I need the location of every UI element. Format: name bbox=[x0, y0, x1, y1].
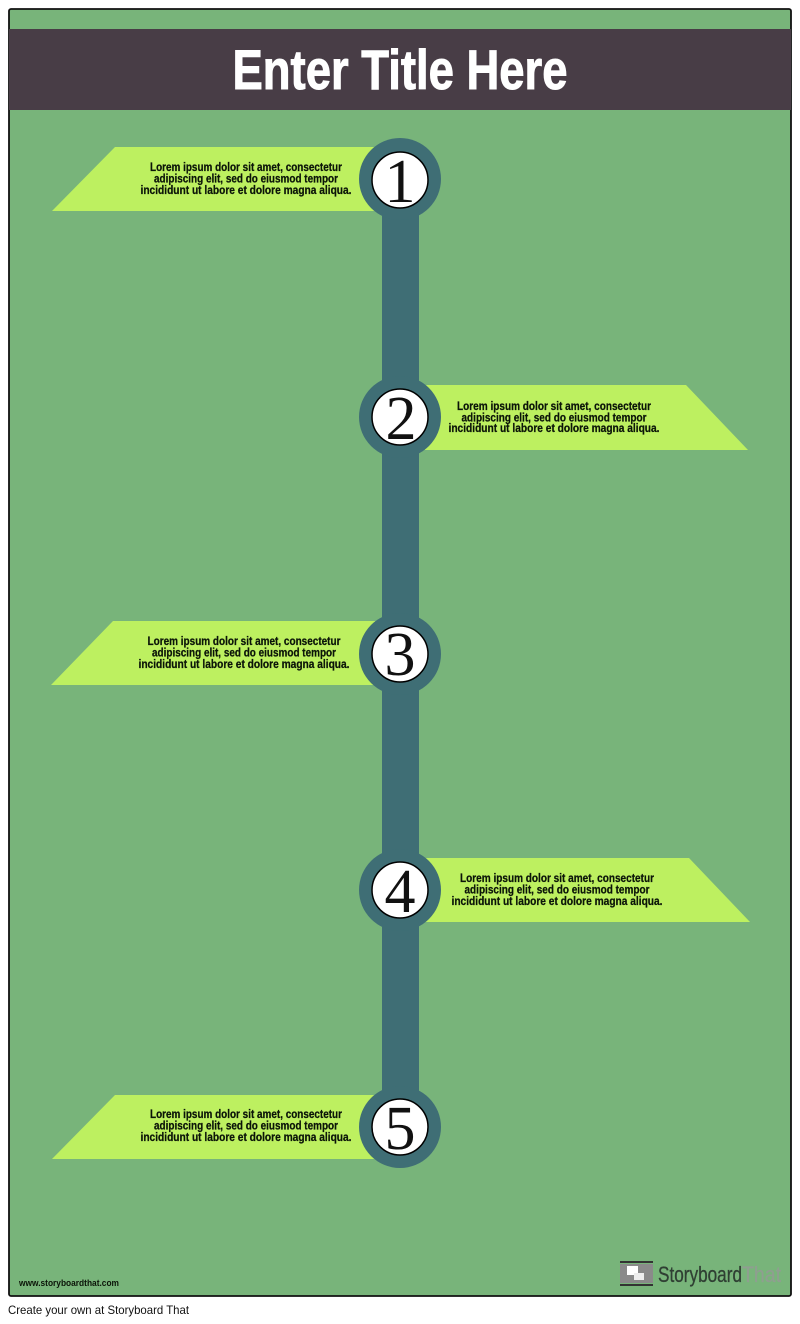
step marker 5 bbox=[359, 1086, 441, 1168]
callout 4: Lorem ipsum dolor sit amet, consectetur bbox=[460, 873, 654, 885]
callout 4 bbox=[425, 858, 750, 922]
timeline bar bbox=[382, 179, 419, 1127]
Storyboard That logo: Storyboard bbox=[658, 1262, 742, 1287]
callout 2 bbox=[425, 385, 748, 450]
callout 5: Lorem ipsum dolor sit amet, consectetur bbox=[150, 1109, 342, 1121]
step marker 5: 5 bbox=[384, 1095, 416, 1163]
callout 3: incididunt ut labore et dolore magna aliqua. bbox=[138, 659, 350, 671]
title banner bbox=[9, 29, 791, 110]
step marker 1 bbox=[359, 138, 441, 220]
callout 1: adipiscing elit, sed do eiusmod tempor bbox=[154, 174, 338, 186]
step marker 3: 3 bbox=[384, 621, 416, 689]
callout 4: incididunt ut labore et dolore magna aliqua. bbox=[452, 896, 662, 908]
callout 3 bbox=[51, 621, 375, 685]
step marker 2 bbox=[359, 376, 441, 458]
callout 1 bbox=[52, 147, 375, 211]
Storyboard That logo bbox=[620, 1261, 781, 1287]
website text: www.storyboardthat.com bbox=[18, 1278, 119, 1288]
callout 1: incididunt ut labore et dolore magna aliqua. bbox=[140, 185, 352, 197]
step marker 3 bbox=[359, 613, 441, 695]
callout 2: Lorem ipsum dolor sit amet, consectetur bbox=[457, 401, 651, 413]
callout 5 bbox=[52, 1095, 375, 1159]
callout 3: adipiscing elit, sed do eiusmod tempor bbox=[152, 648, 336, 660]
callout 2: adipiscing elit, sed do eiusmod tempor bbox=[462, 412, 647, 424]
callout 4: adipiscing elit, sed do eiusmod tempor bbox=[464, 884, 650, 896]
footer text: Create your own at Storyboard That bbox=[8, 1303, 190, 1317]
step marker 4: 4 bbox=[384, 858, 416, 926]
step marker 4 bbox=[359, 849, 441, 931]
callout 3: Lorem ipsum dolor sit amet, consectetur bbox=[148, 636, 341, 648]
step marker 1: 1 bbox=[384, 148, 416, 216]
callout 1: Lorem ipsum dolor sit amet, consectetur bbox=[150, 162, 342, 174]
callout 2: incididunt ut labore et dolore magna aliqua. bbox=[448, 423, 660, 435]
step marker 2: 2 bbox=[386, 385, 416, 453]
Storyboard That logo: That bbox=[742, 1262, 781, 1287]
callout 5: incididunt ut labore et dolore magna aliqua. bbox=[140, 1132, 352, 1144]
callout 5: adipiscing elit, sed do eiusmod tempor bbox=[154, 1120, 338, 1132]
title: Enter Title Here bbox=[232, 38, 568, 101]
